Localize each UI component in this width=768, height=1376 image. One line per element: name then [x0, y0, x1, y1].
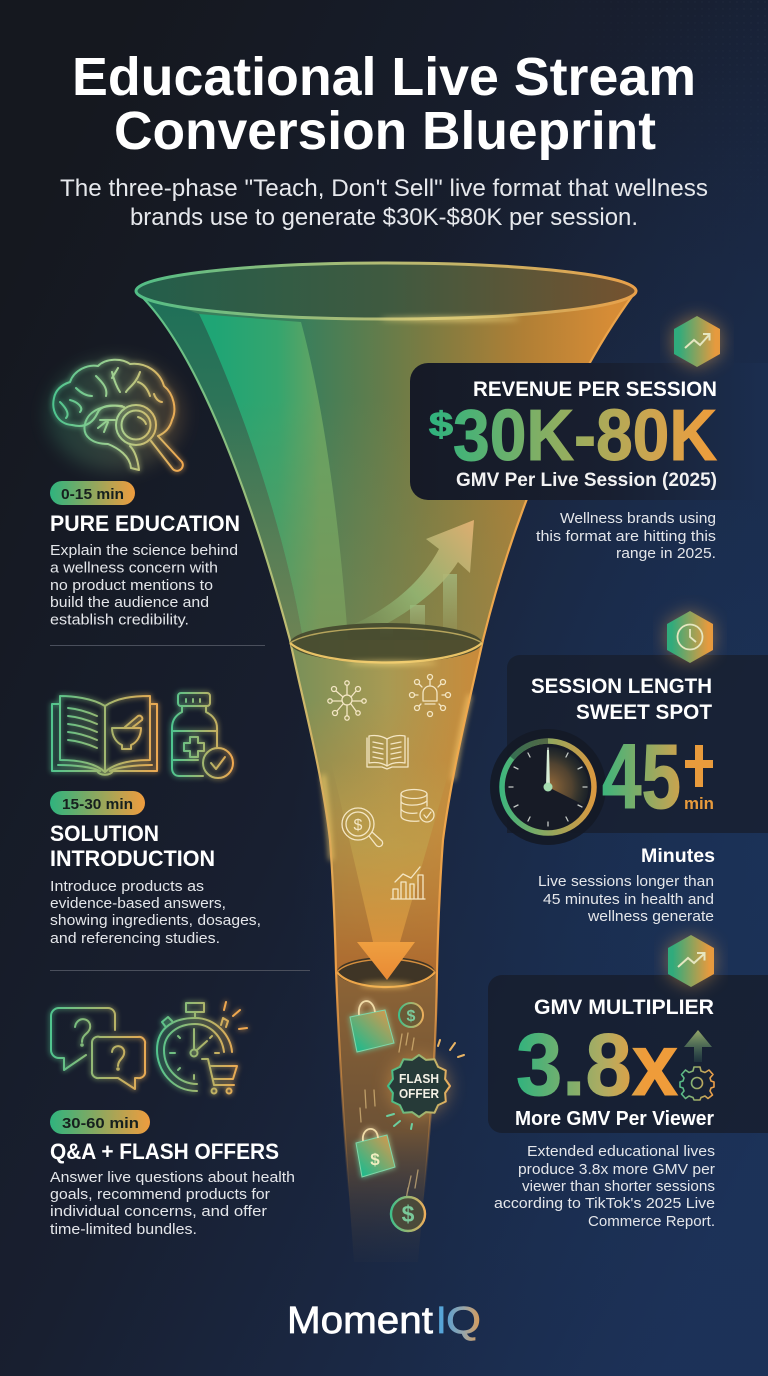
rising growth arrow: [345, 520, 474, 637]
icon: network: [328, 681, 366, 720]
time pill: 30-60 min: [62, 1115, 139, 1132]
logo: Q: [446, 1300, 481, 1342]
icon: stopwatch with cart: [157, 1002, 247, 1094]
heading: [50, 821, 215, 871]
body text: no product mentions to: [50, 577, 213, 594]
lower funnel stem: [336, 970, 437, 1262]
funnel glow: [323, 695, 470, 860]
title: [72, 47, 696, 161]
heading: INTRODUCTION: [50, 846, 215, 871]
big number: $: [429, 406, 453, 444]
big number: 30K-80K: [453, 396, 717, 476]
subtitle: The three-phase "Teach, Don't Sell" live format that wellness: [60, 175, 708, 202]
body text: 45 minutes in health and: [543, 891, 714, 908]
subheading: Minutes: [641, 846, 715, 867]
icon: bar chart growth: [391, 867, 425, 899]
icon: idea dome: [410, 674, 450, 716]
icon: search dollar: [342, 808, 383, 847]
body text: [50, 878, 261, 947]
icon: shopping bag with dollar: $: [370, 1150, 380, 1169]
subheading: More GMV Per Viewer: [515, 1108, 714, 1130]
lower ring: [337, 957, 435, 988]
neck ring: [290, 623, 482, 664]
body text: range in 2025.: [616, 545, 716, 562]
funnel product icons: [350, 1001, 464, 1231]
panel: q&a and flash offers: [50, 1002, 295, 1238]
time pill: [50, 1110, 150, 1134]
panel: session length: [490, 611, 768, 925]
icon: hexagon trend: [674, 316, 720, 367]
icon: dollar coin small: $: [407, 1008, 416, 1025]
arrowhead: [357, 942, 415, 980]
card: [410, 363, 768, 500]
icon: brain with magnifier: [47, 359, 183, 471]
big number: 3.8x: [516, 1015, 678, 1114]
icon: open book: [367, 735, 408, 769]
panel: pure education: [47, 359, 240, 628]
heading: SOLUTION: [50, 821, 159, 846]
flash offer badge: OFFER: [399, 1086, 440, 1101]
time pill: 0-15 min: [61, 486, 124, 503]
heading: PURE EDUCATION: [50, 511, 240, 536]
icon: dollar coin large: $: [402, 1201, 415, 1227]
panel: gmv multiplier: [488, 935, 768, 1230]
body text: showing ingredients, dosages,: [50, 912, 261, 929]
top rim: [136, 263, 636, 320]
icon: dollar coin small: [399, 1003, 423, 1027]
heading: GMV MULTIPLIER: [534, 996, 714, 1019]
body text: and referencing studies.: [50, 930, 220, 947]
body text: [50, 542, 238, 628]
body text: establish credibility.: [50, 612, 189, 628]
flash offer badge: FLASH: [399, 1071, 439, 1086]
icon: question bubbles: [51, 1008, 145, 1089]
icon: shopping bag with dollar: [356, 1129, 395, 1177]
body text: evidence-based answers,: [50, 895, 226, 912]
body text: Introduce products as: [50, 878, 204, 895]
subheading: GMV Per Live Session (2025): [456, 470, 717, 491]
panel: revenue per session: [410, 316, 768, 562]
subtitle: brands use to generate $30K-$80K per session.: [130, 204, 638, 231]
icon: dollar coin large: [391, 1197, 425, 1231]
body text: according to TikTok's 2025 Live: [494, 1195, 715, 1212]
icon: up arrow and gear: [680, 1030, 714, 1100]
icon: book with mortar: [52, 696, 157, 775]
heading: SESSION LENGTH: [531, 675, 712, 698]
logo: I: [436, 1300, 447, 1342]
funnel: [136, 263, 636, 1262]
body text: Commerce Report.: [588, 1213, 715, 1230]
body text: build the audience and: [50, 594, 209, 611]
icon: search dollar: $: [354, 817, 363, 834]
heading: REVENUE PER SESSION: [473, 378, 717, 401]
body text: Extended educational lives: [527, 1143, 715, 1160]
body text: a wellness concern with: [50, 560, 218, 576]
body text: [494, 1143, 715, 1230]
panel: solution introduction: [50, 693, 261, 947]
icon: hexagon trend: [668, 935, 714, 987]
downward beam: [330, 757, 453, 942]
time pill: 15-30 min: [62, 796, 133, 813]
card: [488, 975, 768, 1133]
big number: 45: [602, 726, 681, 828]
heading: Q&A + FLASH OFFERS: [50, 1139, 279, 1164]
heading: [531, 675, 712, 724]
icon: shopping bag: [350, 1001, 394, 1052]
body text: this format are hitting this: [536, 528, 716, 545]
body text: Answer live questions about health: [50, 1169, 295, 1186]
body text: viewer than shorter sessions: [522, 1178, 715, 1195]
icon: supplement bottle: [172, 693, 233, 778]
body text: Wellness brands using: [560, 510, 716, 527]
body text: Explain the science behind: [50, 542, 238, 559]
logo: Moment: [287, 1300, 433, 1342]
heading: SWEET SPOT: [576, 701, 712, 724]
icon: database check: [401, 790, 434, 822]
icon: hexagon clock: [667, 611, 713, 663]
big number: min: [684, 794, 714, 813]
body text: time-limited bundles.: [50, 1221, 197, 1238]
body text: goals, recommend products for: [50, 1186, 270, 1203]
body text: individual concerns, and offer: [50, 1203, 267, 1220]
upper funnel body: [136, 291, 636, 640]
title: Conversion Blueprint: [114, 101, 656, 161]
body text: produce 3.8x more GMV per: [518, 1161, 715, 1178]
title: Educational Live Stream: [72, 47, 696, 107]
funnel edges: [136, 291, 636, 1262]
time pill: [50, 481, 135, 505]
card: [507, 655, 768, 833]
body text: [536, 510, 716, 562]
time pill: [50, 791, 145, 815]
body text: [50, 1169, 295, 1238]
body text: wellness generate: [587, 908, 714, 925]
body text: Live sessions longer than: [538, 873, 714, 890]
motion streaks: [360, 1033, 418, 1200]
flash offer badge: [387, 1040, 464, 1129]
funnel neck body: [290, 640, 483, 970]
subtitle: [60, 175, 708, 231]
funnel line icons: [328, 674, 450, 899]
gauge: [490, 729, 606, 845]
body text: [538, 873, 714, 925]
